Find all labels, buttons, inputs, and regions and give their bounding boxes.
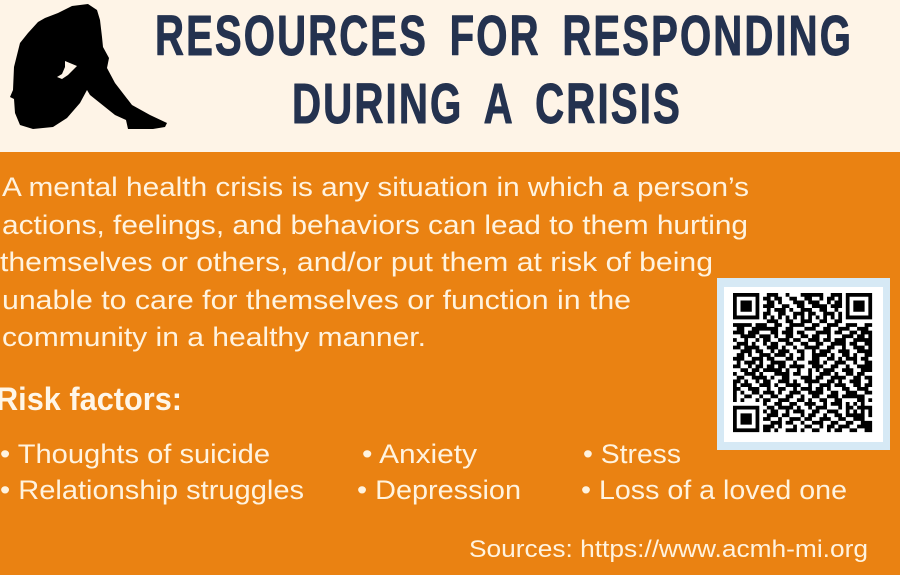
definition paragraph: community in a healthy manner. xyxy=(2,322,426,352)
definition paragraph: unable to care for themselves or function in the xyxy=(2,285,631,315)
definition paragraph: themselves or others, and/or put them at risk of being xyxy=(0,247,713,277)
risk factor list: • Loss of a loved one xyxy=(581,475,847,505)
risk factor list xyxy=(0,439,847,505)
QR code panel xyxy=(717,278,890,450)
risk factor list: • Relationship struggles xyxy=(0,475,304,505)
header band xyxy=(0,0,900,152)
risk factor list: • Thoughts of suicide xyxy=(0,439,270,469)
definition paragraph: actions, feelings, and behaviors can lead to them hurting xyxy=(2,210,748,240)
risk factor list: • Depression xyxy=(357,475,521,505)
definition paragraph: A mental health crisis is any situation in which a person’s xyxy=(2,172,749,202)
title: DURING A CRISIS xyxy=(292,72,682,136)
QR code xyxy=(733,295,872,430)
risk factor list: • Stress xyxy=(583,439,681,469)
icon: seated silhouette of a person xyxy=(10,4,167,129)
orange panel xyxy=(0,152,900,575)
heading: risk factors: Risk factors: xyxy=(0,381,182,417)
risk factor list: • Anxiety xyxy=(362,439,478,469)
definition paragraph xyxy=(0,172,749,352)
title xyxy=(155,4,853,136)
sources line: Sources: https://www.acmh-mi.org xyxy=(469,536,868,563)
